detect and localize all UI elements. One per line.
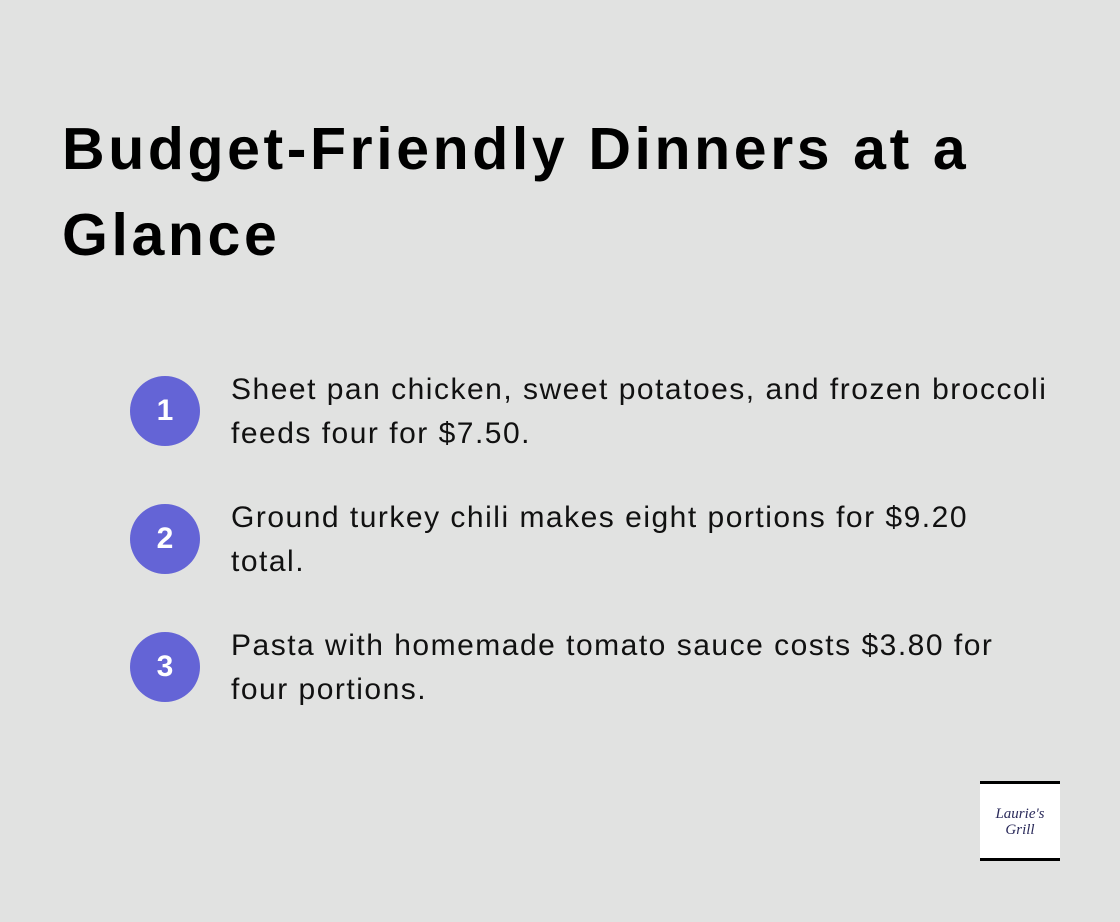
text 1: Sheet pan chicken, sweet potatoes, and frozen broccoli [231, 373, 1047, 406]
logo: Laurie's [995, 806, 1045, 822]
text 3: Pasta with homemade tomato sauce costs $3.80 for [231, 629, 993, 662]
item 2 [130, 501, 968, 578]
title [62, 116, 969, 268]
text 2: total. [231, 545, 305, 578]
text 1 [231, 373, 1047, 450]
title: Budget-Friendly Dinners at a [62, 116, 969, 182]
item 1 [130, 373, 1047, 450]
logo [980, 781, 1060, 861]
badge 3: 3 [157, 650, 173, 683]
title: Glance [62, 202, 280, 268]
text 2 [231, 501, 968, 578]
badge 1: 1 [157, 394, 173, 427]
badge 3 [130, 632, 200, 702]
badge 2 [130, 504, 200, 574]
badge 2: 2 [157, 522, 173, 555]
text 2: Ground turkey chili makes eight portions for $9.20 [231, 501, 968, 534]
logo: Grill [1005, 822, 1035, 838]
badge 1 [130, 376, 200, 446]
item 3 [130, 629, 993, 706]
text 3: four portions. [231, 673, 427, 706]
text 3 [231, 629, 993, 706]
text 1: feeds four for $7.50. [231, 417, 531, 450]
